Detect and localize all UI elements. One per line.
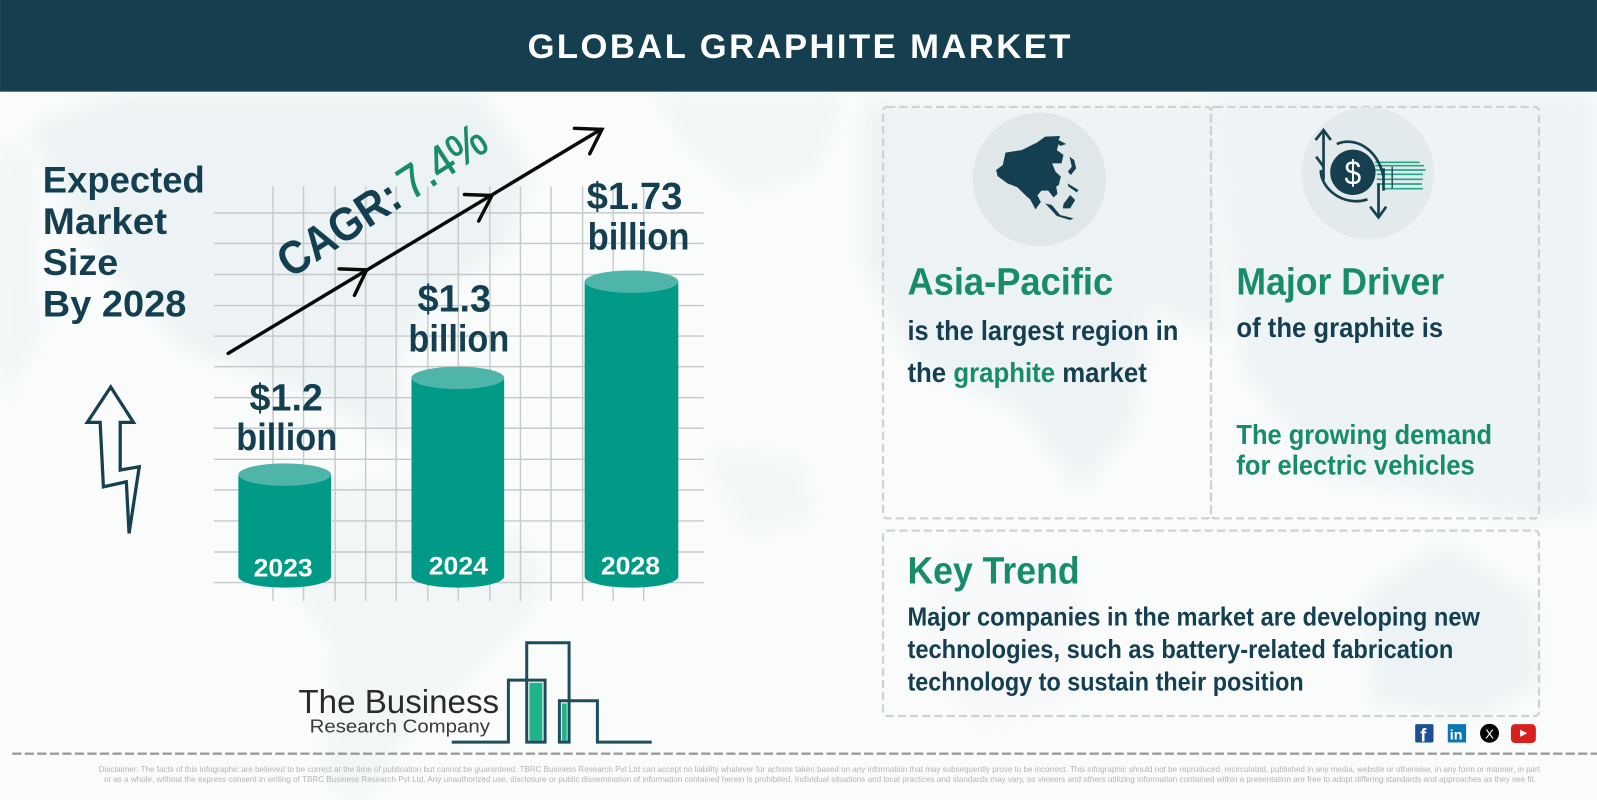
heading: Key Trend: Key Trend xyxy=(907,550,1080,592)
icon: dollar cycle xyxy=(1302,107,1434,239)
header bar xyxy=(0,0,1597,92)
text: driver xyxy=(1236,419,1492,481)
disclaimer xyxy=(99,765,1541,784)
bar: 2028 xyxy=(585,270,678,588)
panel: Asia-Pacific xyxy=(883,107,1211,518)
bar: 2023: 2023 xyxy=(254,554,313,582)
heading: expected market size: Expected xyxy=(43,159,205,200)
CAGR label: CAGR: xyxy=(267,170,410,287)
value: 2028 xyxy=(587,175,690,258)
bar: 2028: 2028 xyxy=(601,552,660,580)
value: 2028: billion xyxy=(588,216,690,258)
icon: lightning arrow xyxy=(87,387,139,533)
text: driver: The growing demand xyxy=(1236,419,1492,450)
logo: Research Company xyxy=(310,715,491,736)
bar: 2023 xyxy=(238,463,331,588)
icon: LinkedIn: in xyxy=(1450,727,1462,743)
text: key trend body: technologies, such as battery-related fabrication xyxy=(907,634,1453,664)
icon: YouTube xyxy=(1511,724,1536,743)
disclaimer: or as a whole, without the express consent in writing of TBRC Business Research Pvt Ltd. Any unauthorized use, disclosure or public dissemination of information contained herein is prohibited. Individual situations and local practices and standards may vary, so viewers and others utilizing information contained within a presentation are free to adopt differing standards and approaches as they see fit. xyxy=(104,775,1536,784)
value: 2023: billion xyxy=(236,416,337,458)
bar: 2024 xyxy=(411,367,504,588)
text: largest region xyxy=(907,315,1178,388)
text: key trend body: Major companies in the market are developing new xyxy=(907,601,1481,631)
icon: Facebook: f xyxy=(1420,724,1427,745)
CAGR label: 7.4% xyxy=(388,113,496,209)
panel: Key Trend xyxy=(883,531,1539,716)
heading: expected market size: Market xyxy=(43,201,167,242)
title: GLOBAL GRAPHITE MARKET xyxy=(528,28,1070,66)
text: driver: for electric vehicles xyxy=(1236,450,1475,481)
text: key trend body: technology to sustain their position xyxy=(907,667,1304,697)
CAGR label xyxy=(267,113,496,287)
heading: Major Driver: Major Driver xyxy=(1236,260,1445,302)
heading: expected market size: Size xyxy=(43,242,118,283)
text: largest region: the graphite market xyxy=(907,357,1147,388)
heading: expected market size xyxy=(43,159,205,325)
value: 2024: billion xyxy=(408,317,509,359)
social icons xyxy=(1415,724,1536,745)
value: 2028: $1.73 xyxy=(587,175,682,217)
value: 2023 xyxy=(236,376,337,458)
bar chart xyxy=(214,175,704,601)
text: of the graphite: of the graphite is xyxy=(1236,312,1443,343)
heading: expected market size: By 2028 xyxy=(43,284,186,325)
value: 2024 xyxy=(408,278,509,359)
disclaimer: Disclaimer: The facts of this infographic are believed to be correct at the time of publication but cannot be guaranteed. TBRC Business Research Pvt Ltd can accept no liability whatever for actions taken based on any information that may subsequently prove to be incorrect. This infographic should not be reproduced, recirculated, published in any media, website or otherwise, in any form or manner, in part xyxy=(99,765,1541,774)
text: key trend body xyxy=(907,601,1481,697)
icon: X: X xyxy=(1485,726,1494,741)
panel: Major Driver xyxy=(1211,107,1539,518)
logo xyxy=(298,643,652,742)
heading: Asia-Pacific: Asia-Pacific xyxy=(907,260,1113,302)
value: 2024: $1.3 xyxy=(418,278,491,320)
logo: The Business xyxy=(298,684,499,721)
icon: dollar cycle: $ xyxy=(1345,155,1361,193)
icon: Asia map xyxy=(973,113,1106,246)
bar: 2024: 2024 xyxy=(429,552,488,580)
text: largest region: is the largest region in xyxy=(907,315,1178,346)
value: 2023: $1.2 xyxy=(250,376,323,418)
growth arrow xyxy=(228,128,602,353)
